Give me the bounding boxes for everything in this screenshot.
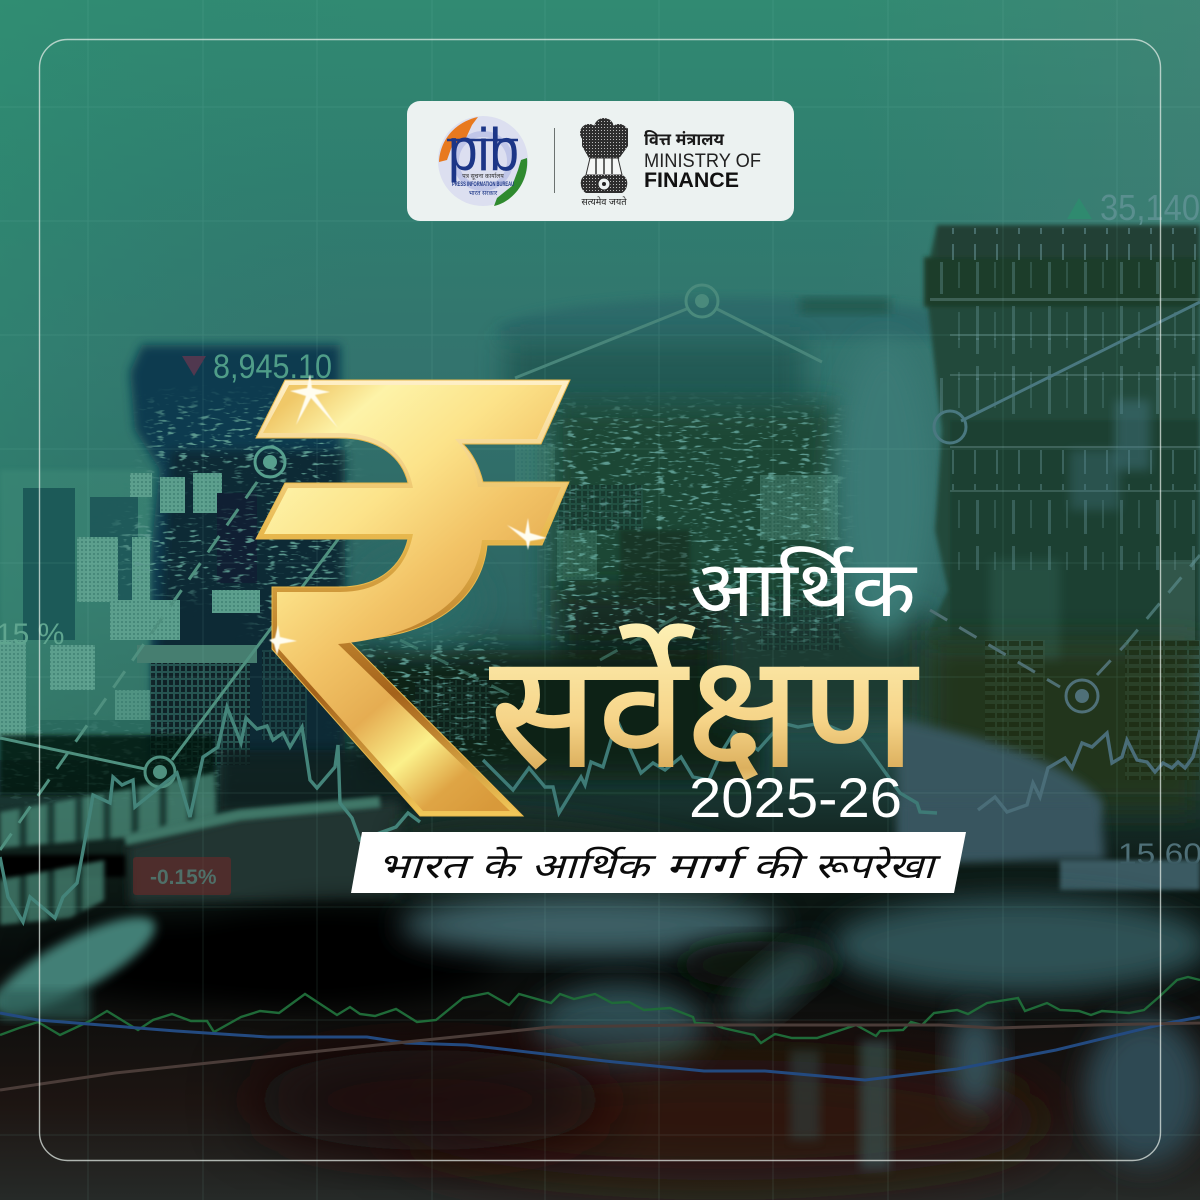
logo: national emblem: सत्यमेव जयते (582, 196, 627, 208)
icon: chart node marker (1066, 680, 1098, 712)
logo: PIB: PRESS INFORMATION BUREAU (452, 182, 514, 188)
ticker: -0.15%: -0.15% (150, 866, 217, 889)
logo panel (407, 101, 794, 221)
heading: आर्थिक: आर्थिक (690, 545, 918, 633)
chart: jagged price line (0, 707, 1200, 922)
icon: chart node marker (686, 285, 718, 317)
background: city skyline centre (415, 445, 840, 740)
ticker: -0.15% (133, 857, 231, 895)
logo: PIB: पत्र सूचना कार्यालय (462, 172, 504, 181)
logo text: Ministry of Finance: MINISTRY OF (644, 150, 761, 172)
icon: sparkle right (507, 518, 547, 550)
background: coin stack right (924, 225, 1200, 810)
icon: sparkle top (290, 374, 338, 428)
background: middle coin stack (360, 298, 935, 780)
banner: subtitle: रूपरेखा (814, 846, 942, 886)
logo: PIB (438, 116, 528, 206)
left coin ridges (0, 773, 218, 848)
logo: PIB: भारत सरकार (469, 191, 498, 197)
icon: sparkle lower left (269, 625, 297, 655)
banner: subtitle: के (481, 846, 523, 886)
left bright coin blob (0, 900, 167, 1030)
background: city speckle (0, 405, 840, 790)
icon: down triangle (182, 356, 206, 376)
background: dark navy coin stack left (130, 345, 345, 760)
icon: chart node marker (934, 411, 966, 443)
icon: chart node marker (145, 757, 175, 787)
background: blurred foreground coins (0, 720, 1200, 1180)
icon: chart node marker (255, 447, 285, 477)
banner: subtitle: आर्थिक (531, 846, 657, 886)
logo text: Ministry of Finance: वित्त मंत्रालय (644, 129, 725, 149)
lower dark band (30, 918, 370, 1002)
ticker: 8,945.10: 8,945.10 (213, 348, 332, 386)
ticker: 15.60: 15,60 (1118, 838, 1200, 871)
heading: 2025-26: 2025-26 (689, 766, 902, 829)
heading: सर्वेक्षण: सर्वेक्षण (490, 624, 919, 800)
banner: subtitle (351, 832, 966, 893)
chart: upper trend lines with node markers (0, 285, 1200, 850)
right coin (895, 720, 1100, 860)
chart: bottom green line (0, 977, 1200, 1043)
logo: national emblem (580, 118, 628, 208)
icon: up triangle (1067, 198, 1092, 219)
banner: subtitle: मार्ग (665, 846, 751, 886)
chart: bottom blue line (0, 1013, 1200, 1080)
banner: subtitle: भारत (377, 847, 474, 886)
logo: PIB: pib (448, 116, 519, 183)
icon: golden rupee symbol (256, 374, 570, 816)
chart: bottom brown line (0, 1023, 1200, 1090)
divider (554, 128, 555, 193)
background: city skyline left (0, 470, 307, 765)
logo text: Ministry of Finance: FINANCE (644, 169, 739, 192)
banner: subtitle: की (752, 846, 809, 886)
logo text: Ministry of Finance (644, 129, 761, 192)
